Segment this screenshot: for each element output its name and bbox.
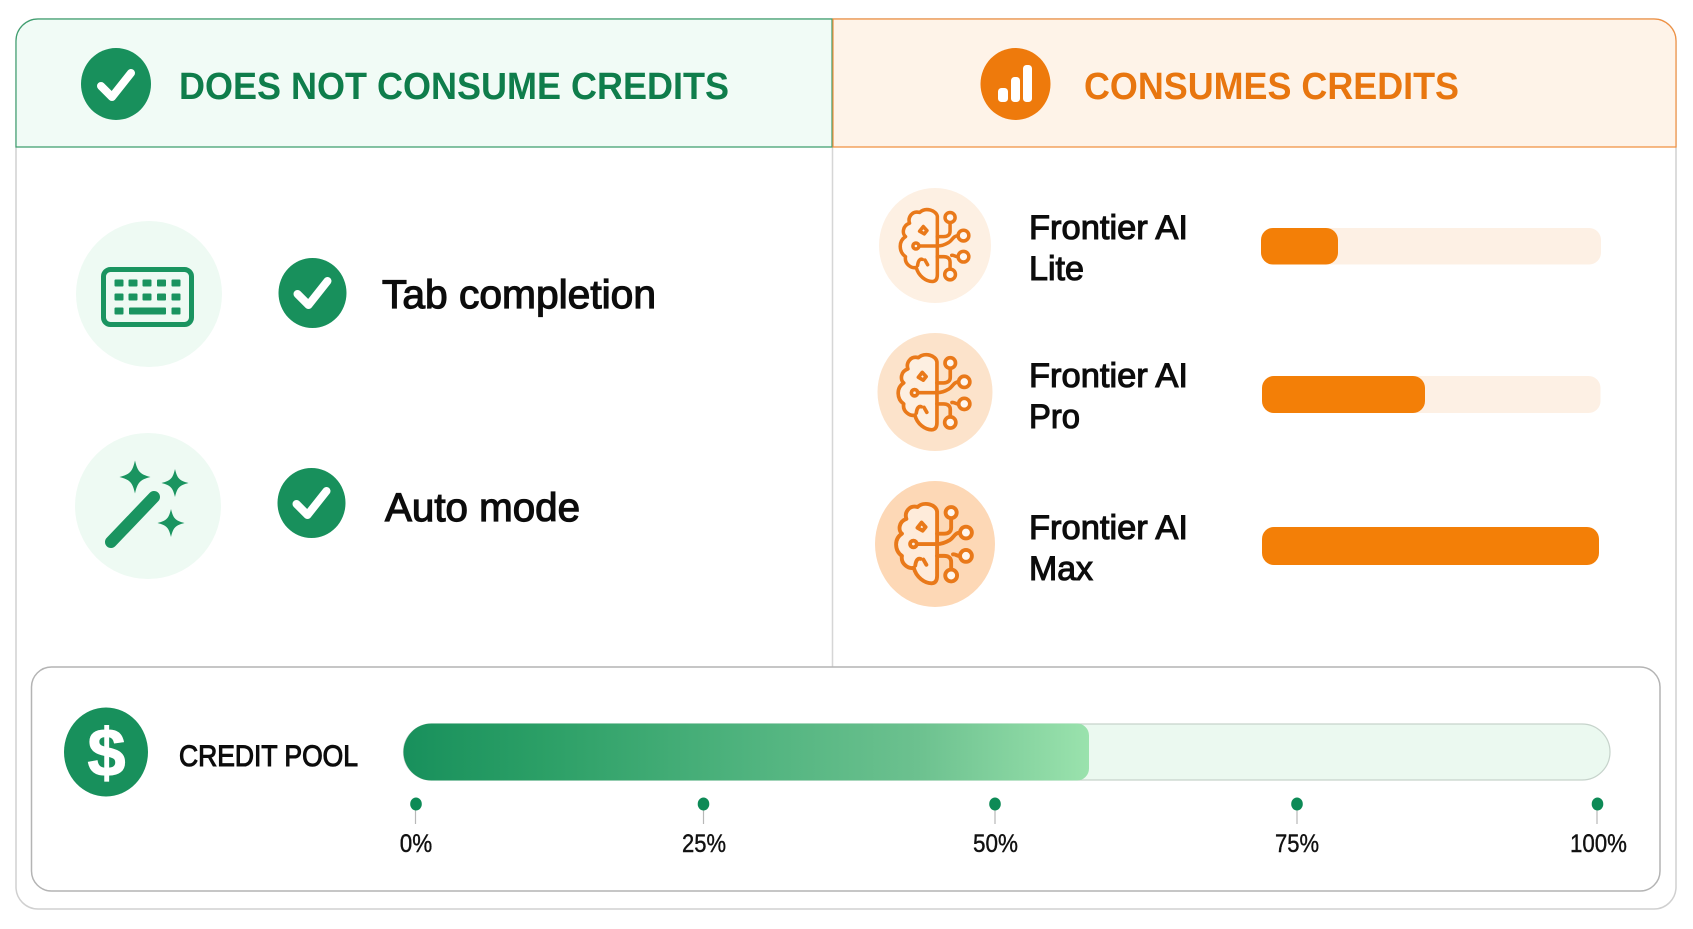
row: frontier ai max — [875, 481, 1599, 607]
scale tick: 75% — [1275, 798, 1319, 858]
progress bar: credit pool — [404, 724, 1610, 780]
scale tick: 100%: 100% — [1570, 830, 1627, 858]
icon: brain, strong tint — [875, 481, 995, 607]
label: frontier ai max: Max — [1029, 550, 1093, 588]
label: auto mode: Auto mode — [385, 486, 580, 530]
label: frontier ai lite: Lite — [1029, 250, 1084, 288]
panel: credit pool — [32, 667, 1660, 891]
icon: brain, light tint — [879, 188, 991, 303]
label: frontier ai lite: Frontier AI — [1029, 209, 1188, 247]
bar: max usage — [1262, 527, 1599, 565]
row: auto mode — [75, 433, 580, 579]
row: frontier ai lite — [879, 188, 1601, 303]
scale tick: 25% — [682, 798, 726, 858]
icon: green check badge — [81, 48, 151, 120]
scale tick: 0%: 0% — [400, 830, 432, 858]
scale tick: 50%: 50% — [973, 830, 1018, 858]
icon: check badge — [278, 258, 346, 328]
label: credit pool: CREDIT POOL — [179, 740, 358, 773]
icon: keyboard — [76, 221, 222, 367]
icon: brain, medium tint — [878, 333, 992, 451]
label: tab completion: Tab completion — [382, 273, 656, 317]
scale tick: 100% — [1570, 798, 1627, 858]
heading: consumes credits: CONSUMES CREDITS — [1084, 66, 1459, 108]
bar: lite usage — [1261, 228, 1601, 264]
heading: does not consume credits: DOES NOT CONSUME CREDITS — [179, 66, 729, 108]
scale tick: 50% — [973, 798, 1018, 858]
row: tab completion — [76, 221, 656, 367]
bar: pro usage — [1262, 376, 1600, 413]
icon: orange bar chart badge — [980, 48, 1050, 120]
panel header: consumes credits — [833, 19, 1676, 147]
panel header: does not consume credits — [16, 19, 832, 147]
scale tick: 75%: 75% — [1275, 830, 1319, 858]
label: frontier ai pro: Frontier AI — [1029, 357, 1188, 395]
row: frontier ai pro — [878, 333, 1600, 451]
scale tick: 0% — [400, 798, 432, 858]
icon: check badge — [278, 468, 346, 538]
label: frontier ai max: Frontier AI — [1029, 509, 1188, 547]
label: frontier ai pro: Pro — [1029, 398, 1080, 436]
icon: dollar badge: $ — [88, 715, 125, 791]
icon: magic wand — [75, 433, 221, 579]
icon: dollar badge — [64, 708, 148, 796]
scale tick: 25%: 25% — [682, 830, 726, 858]
